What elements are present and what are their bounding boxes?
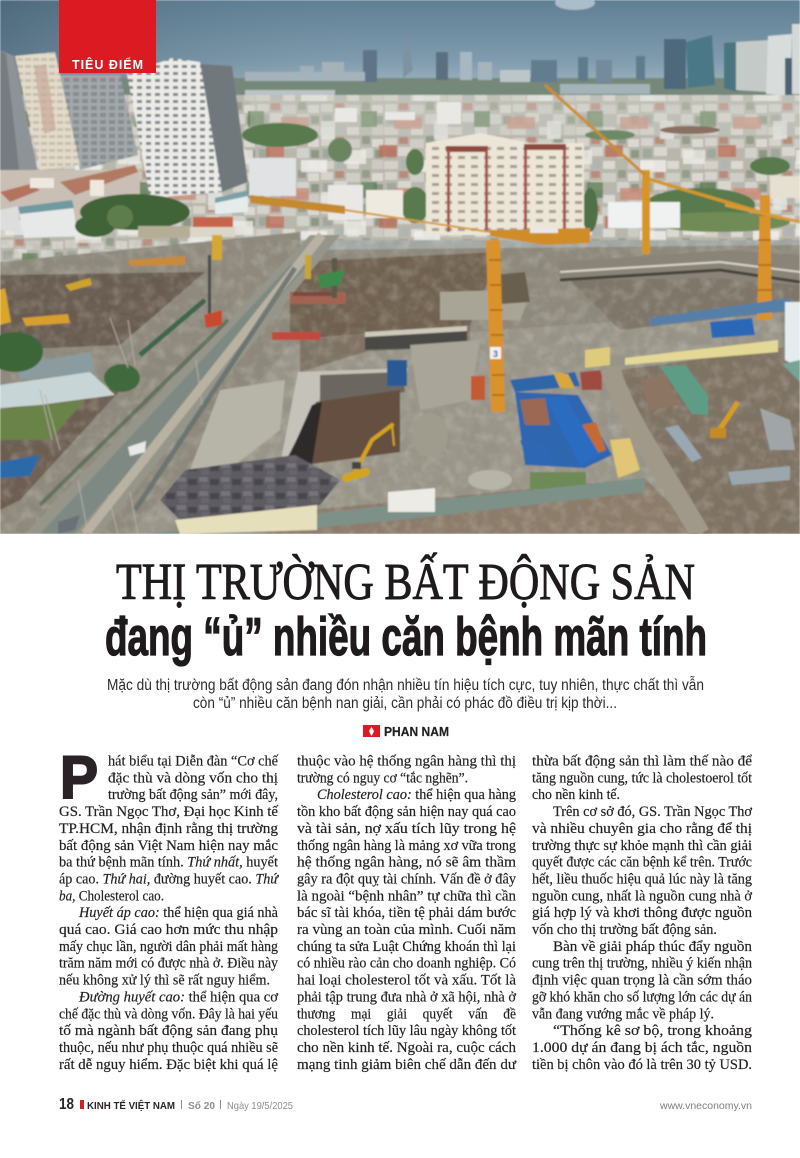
small sheds and grass by fence (530, 370, 640, 489)
article column 2: cholesterol tích lũy lâu ngày không tốt (297, 1023, 516, 1039)
far ground band (18, 77, 800, 96)
icon: red pen square (363, 725, 380, 737)
article column 1: TP.HCM, nhận định rằng thị trường (59, 821, 278, 837)
section tag: TIÊU ĐIỂM (59, 0, 156, 73)
footer (59, 1096, 752, 1113)
article column 1: hát biểu tại Diễn đàn “Cơ chế (108, 754, 279, 770)
article column 1: trường bất động sản” mới đây, (108, 787, 278, 803)
article column 2: và tài sản, nợ xấu tích lũy trong hệ (297, 821, 516, 837)
article column 1: quá cao. Giá cao hơn mức thu nhập (59, 922, 278, 938)
perimeter fence (146, 478, 645, 534)
orange storage and tarps (471, 372, 612, 468)
article column 3: tiền bị chôn vào đó là trên 30 tỷ USD. (532, 1057, 752, 1073)
right tower cluster (664, 24, 800, 96)
article column 2: cho nền kinh tế. Ngoài ra, cuộc cách (297, 1040, 516, 1056)
photo: aerial view of construction site and city (0, 0, 800, 534)
article column 1: GS. Trần Ngọc Thơ, Đại học Kinh tế (59, 804, 279, 820)
parking structure right (558, 250, 800, 285)
crane 3 (725, 195, 800, 320)
article column 1: Đường huyết cao: thể hiện qua cơ (78, 989, 279, 1005)
article column 1: đặc thù và dòng vốn cho thị (108, 770, 278, 786)
article column 1: mấy chục lần, người dân phải mất hàng (59, 939, 278, 955)
distant low blocks (244, 83, 651, 96)
article column 3: nguồn cung, nhất là nguồn cung nhà ở (532, 888, 753, 904)
article column 2 (297, 754, 517, 1073)
brick stockpile (272, 255, 346, 340)
page number: 18 (59, 1096, 74, 1113)
article column 1: trăm năm mới có được nhà ở. Điều này (59, 956, 279, 972)
article column 3: vốn cho thị trường bất động sản. (532, 922, 717, 938)
tree band (75, 194, 190, 237)
mid-rise apartment building (426, 133, 584, 235)
article column 2: thương mại giải quyết vấn đề (297, 1006, 516, 1022)
article column 2: chúng ta sửa Luật Chứng khoán thì lại (297, 939, 516, 955)
article column 1: nếu không xử lý thì sẽ rất nguy hiểm. (59, 973, 270, 989)
article column 3: trường thực sự khỏe mạnh thì cần giải (532, 838, 752, 854)
crane 1 tower and jib: 3 (493, 349, 498, 359)
article column 2: trường có nguy cơ “tắc nghẽn”. (297, 770, 468, 786)
sky (0, 0, 800, 79)
article column 2: Cholesterol cao: thể hiện qua hàng (317, 787, 516, 803)
low buildings centre-left (138, 190, 248, 238)
article column 1: rất dễ nguy hiểm. Đặc biệt khi quá lệ (59, 1057, 278, 1073)
article column 1: tố mà ngành bất động sản đang phụ (59, 1023, 278, 1039)
drop cap: P (60, 744, 98, 811)
utility poles (40, 318, 202, 534)
excavation pit (280, 368, 408, 468)
article column 3: 1.000 dự án đang bị ách tắc, nguồn (532, 1040, 752, 1056)
article column 1 (59, 754, 279, 1073)
article column 3: cho nền kinh tế. (532, 787, 620, 803)
issue and date: Ngày 19/5/2025 (227, 1100, 293, 1112)
green-roof shed (640, 365, 708, 415)
article column 3: thừa bất động sản thì làm thế nào để (532, 754, 753, 770)
article column 2: thuộc vào hệ thống ngân hàng thì thị (297, 754, 516, 770)
article column 2: ra vùng an toàn của mình. Cuối năm (297, 922, 516, 938)
article column 2: phải tập trung đưa nhà ở xã hội, nhà ở (297, 989, 517, 1005)
standfirst: Mặc dù thị trường bất động sản đang đón nhận nhiều tín hiệu tích cực, tuy nhiên, thực chất thì vẫn (107, 677, 704, 694)
article column 3 (532, 754, 753, 1073)
issue and date: Số 20 (188, 1100, 215, 1112)
crane 1 tower and jib (250, 195, 590, 412)
article column 2: có nhiều rào cản cho doanh nghiệp. Có (297, 956, 516, 972)
concrete slab upper (365, 272, 530, 350)
article column 3: gỡ khó khăn cho số lượng lớn các dự án (532, 989, 752, 1005)
website: www.vneconomy.vn (659, 1100, 752, 1112)
article column 2: gây ra đột quỵ tài chính. Vấn đề ở đây (297, 871, 517, 887)
article column 1: ba, Cholesterol cao. (59, 888, 164, 904)
article column 3: vẫn đang vướng mắc về pháp lý. (532, 1006, 714, 1022)
main road (25, 235, 340, 534)
cream hoarding and white board (175, 488, 435, 534)
article column 1: Huyết áp cao: thể hiện qua giá nhà (78, 905, 279, 921)
curved service road (610, 368, 700, 534)
light concrete patches (190, 340, 512, 490)
publication name with red marker: KINH TẾ VIỆT NAM (87, 1099, 175, 1112)
article column 2: là ngoài “bệnh nhân” tự chữa thì cần (297, 888, 516, 904)
article column 3: “Thống kê sơ bộ, trong khoảng (553, 1023, 752, 1039)
yellow excavator (346, 425, 394, 478)
stacked concrete slabs (160, 455, 340, 520)
crane 2 (545, 85, 780, 254)
article column 3: Bàn về giải pháp thúc đẩy nguồn (553, 939, 752, 955)
article column 3: tăng nguồn cung, tức là cholestoerol tốt (532, 770, 752, 786)
construction ground (0, 232, 800, 534)
standfirst (107, 677, 704, 712)
article column 1: áp cao. Thứ hai, đường huyết cao. Thứ (59, 871, 279, 887)
right-side excavator and materials (665, 302, 800, 485)
article column 1: thuộc, nếu như phụ thuộc quá nhiều sẽ (59, 1040, 278, 1056)
byline (363, 725, 449, 739)
author name: PHAN NAM (384, 725, 449, 739)
pile driver (204, 235, 222, 328)
issue and date (181, 1100, 293, 1112)
left-side buildings (0, 332, 140, 478)
city fabric (0, 95, 800, 265)
article column 2: hai loại cholesterol tốt và xấu. Tốt là (297, 973, 517, 989)
article column 2: tồn kho bất động sản hiện nay quá cao (297, 804, 516, 820)
article column 3: hết, liều thuốc hiệu quả lúc này là tăng (532, 871, 752, 887)
left tower block dark (0, 50, 38, 170)
cream tower (15, 52, 138, 170)
yellow wall upper right (585, 298, 792, 368)
article column 2: hệ thống ngân hàng, nó sẽ âm thầm (297, 855, 516, 871)
white buildings in city (249, 102, 800, 228)
article column 3: giá hợp lý và khơi thông được nguồn (532, 905, 752, 921)
white apartment tower (127, 58, 248, 198)
site boundary band (300, 239, 800, 250)
article column 1: ba thứ bệnh mãn tính. Thứ nhất, huyết (59, 855, 278, 871)
article column 2: bác sĩ tài khóa, tiền tệ phải dám bước (297, 905, 516, 921)
article column 3: quyết được các căn bệnh kể trên. Trước (532, 855, 752, 871)
red roofs and low buildings left (0, 165, 140, 238)
construction machines left (0, 256, 185, 326)
article column 1: chế đặc thù và dòng vốn. Đây là hai yếu (59, 1006, 278, 1022)
headline (105, 552, 707, 667)
article column 3: và nhiều chuyên gia cho rằng để thị (532, 821, 752, 837)
blue cover on pit edge (387, 360, 407, 386)
article column 3: Trên cơ sở đó, GS. Trần Ngọc Thơ (553, 804, 752, 820)
article column 3: cung trên thị trường, nhiều ý kiến nhận (532, 956, 752, 972)
standfirst: còn “ủ” nhiều căn bệnh nan giải, cần phải có phác đồ điều trị kịp thời... (193, 695, 617, 712)
green patches (242, 123, 790, 232)
article column 2: mạng tinh giảm biên chế dẫn đến dư (297, 1057, 517, 1073)
distant skyline (244, 50, 646, 83)
article column 2: thống ngân hàng là mảng xơ vữa trong (297, 838, 516, 854)
article column 3: định việc quan trọng là cần sớm tháo (532, 973, 752, 989)
section tag: TIÊU ĐIỂM: TIÊU ĐIỂM (72, 57, 143, 72)
article column 1: bất động sản Việt Nam hiện nay mắc (59, 838, 278, 854)
